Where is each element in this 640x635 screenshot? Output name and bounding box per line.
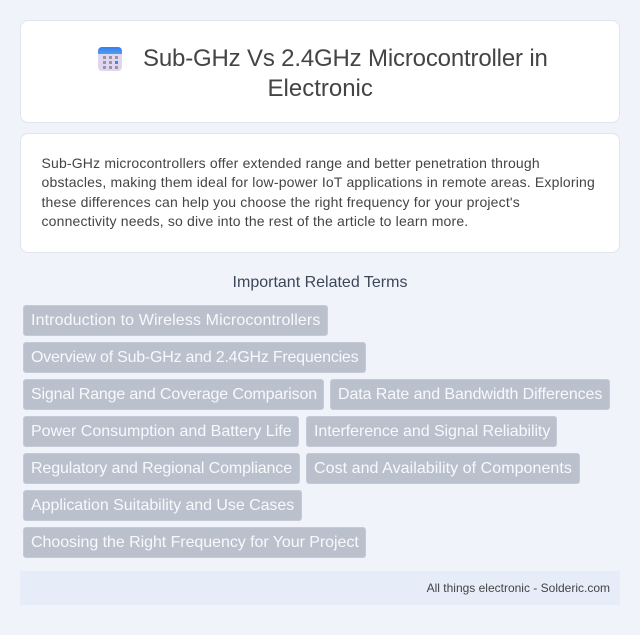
tag: Choosing the Right Frequency for Your Project (31, 534, 359, 551)
tag: Application Suitability and Use Cases (31, 497, 294, 514)
intro paragraph: Sub-GHz microcontrollers offer extended range and better penetration through (42, 155, 540, 171)
tag: Cost and Availability of Components (314, 460, 572, 477)
panel: introduction text (20, 133, 620, 253)
tag (23, 305, 328, 336)
tag (306, 416, 557, 447)
tag (23, 527, 366, 558)
title (143, 45, 548, 102)
tag: Regulatory and Regional Compliance (31, 460, 292, 477)
heading: important related terms: Important Related Terms (233, 274, 407, 291)
footer text: All things electronic - Solderic.com (427, 581, 610, 595)
intro paragraph: these differences can help you choose the right frequency for your project's (42, 194, 520, 210)
tag (330, 379, 610, 410)
tag: Power Consumption and Battery Life (31, 423, 292, 440)
intro paragraph: obstacles, making them ideal for low-power IoT applications in remote areas. Exploring (42, 174, 595, 190)
intro paragraph: connectivity needs, so dive into the rest of the article to learn more. (42, 213, 468, 229)
panel: title card (20, 20, 620, 123)
panel: related term tags (23, 305, 610, 558)
tag: Interference and Signal Reliability (314, 423, 550, 440)
tag: Data Rate and Bandwidth Differences (338, 386, 602, 403)
tag: Signal Range and Coverage Comparison (31, 386, 317, 403)
tag (306, 453, 580, 484)
icon: calendar grid (98, 47, 122, 71)
title: Electronic (268, 75, 373, 102)
footer (20, 571, 620, 605)
tag (23, 342, 366, 373)
tag (23, 416, 299, 447)
tag: Introduction to Wireless Microcontrollers (31, 312, 320, 329)
title: Sub-GHz Vs 2.4GHz Microcontroller in (143, 45, 548, 72)
intro paragraph (42, 155, 595, 229)
tag (23, 490, 302, 521)
tag (23, 453, 300, 484)
tag (23, 379, 324, 410)
tag: Overview of Sub-GHz and 2.4GHz Frequencies (31, 349, 358, 366)
